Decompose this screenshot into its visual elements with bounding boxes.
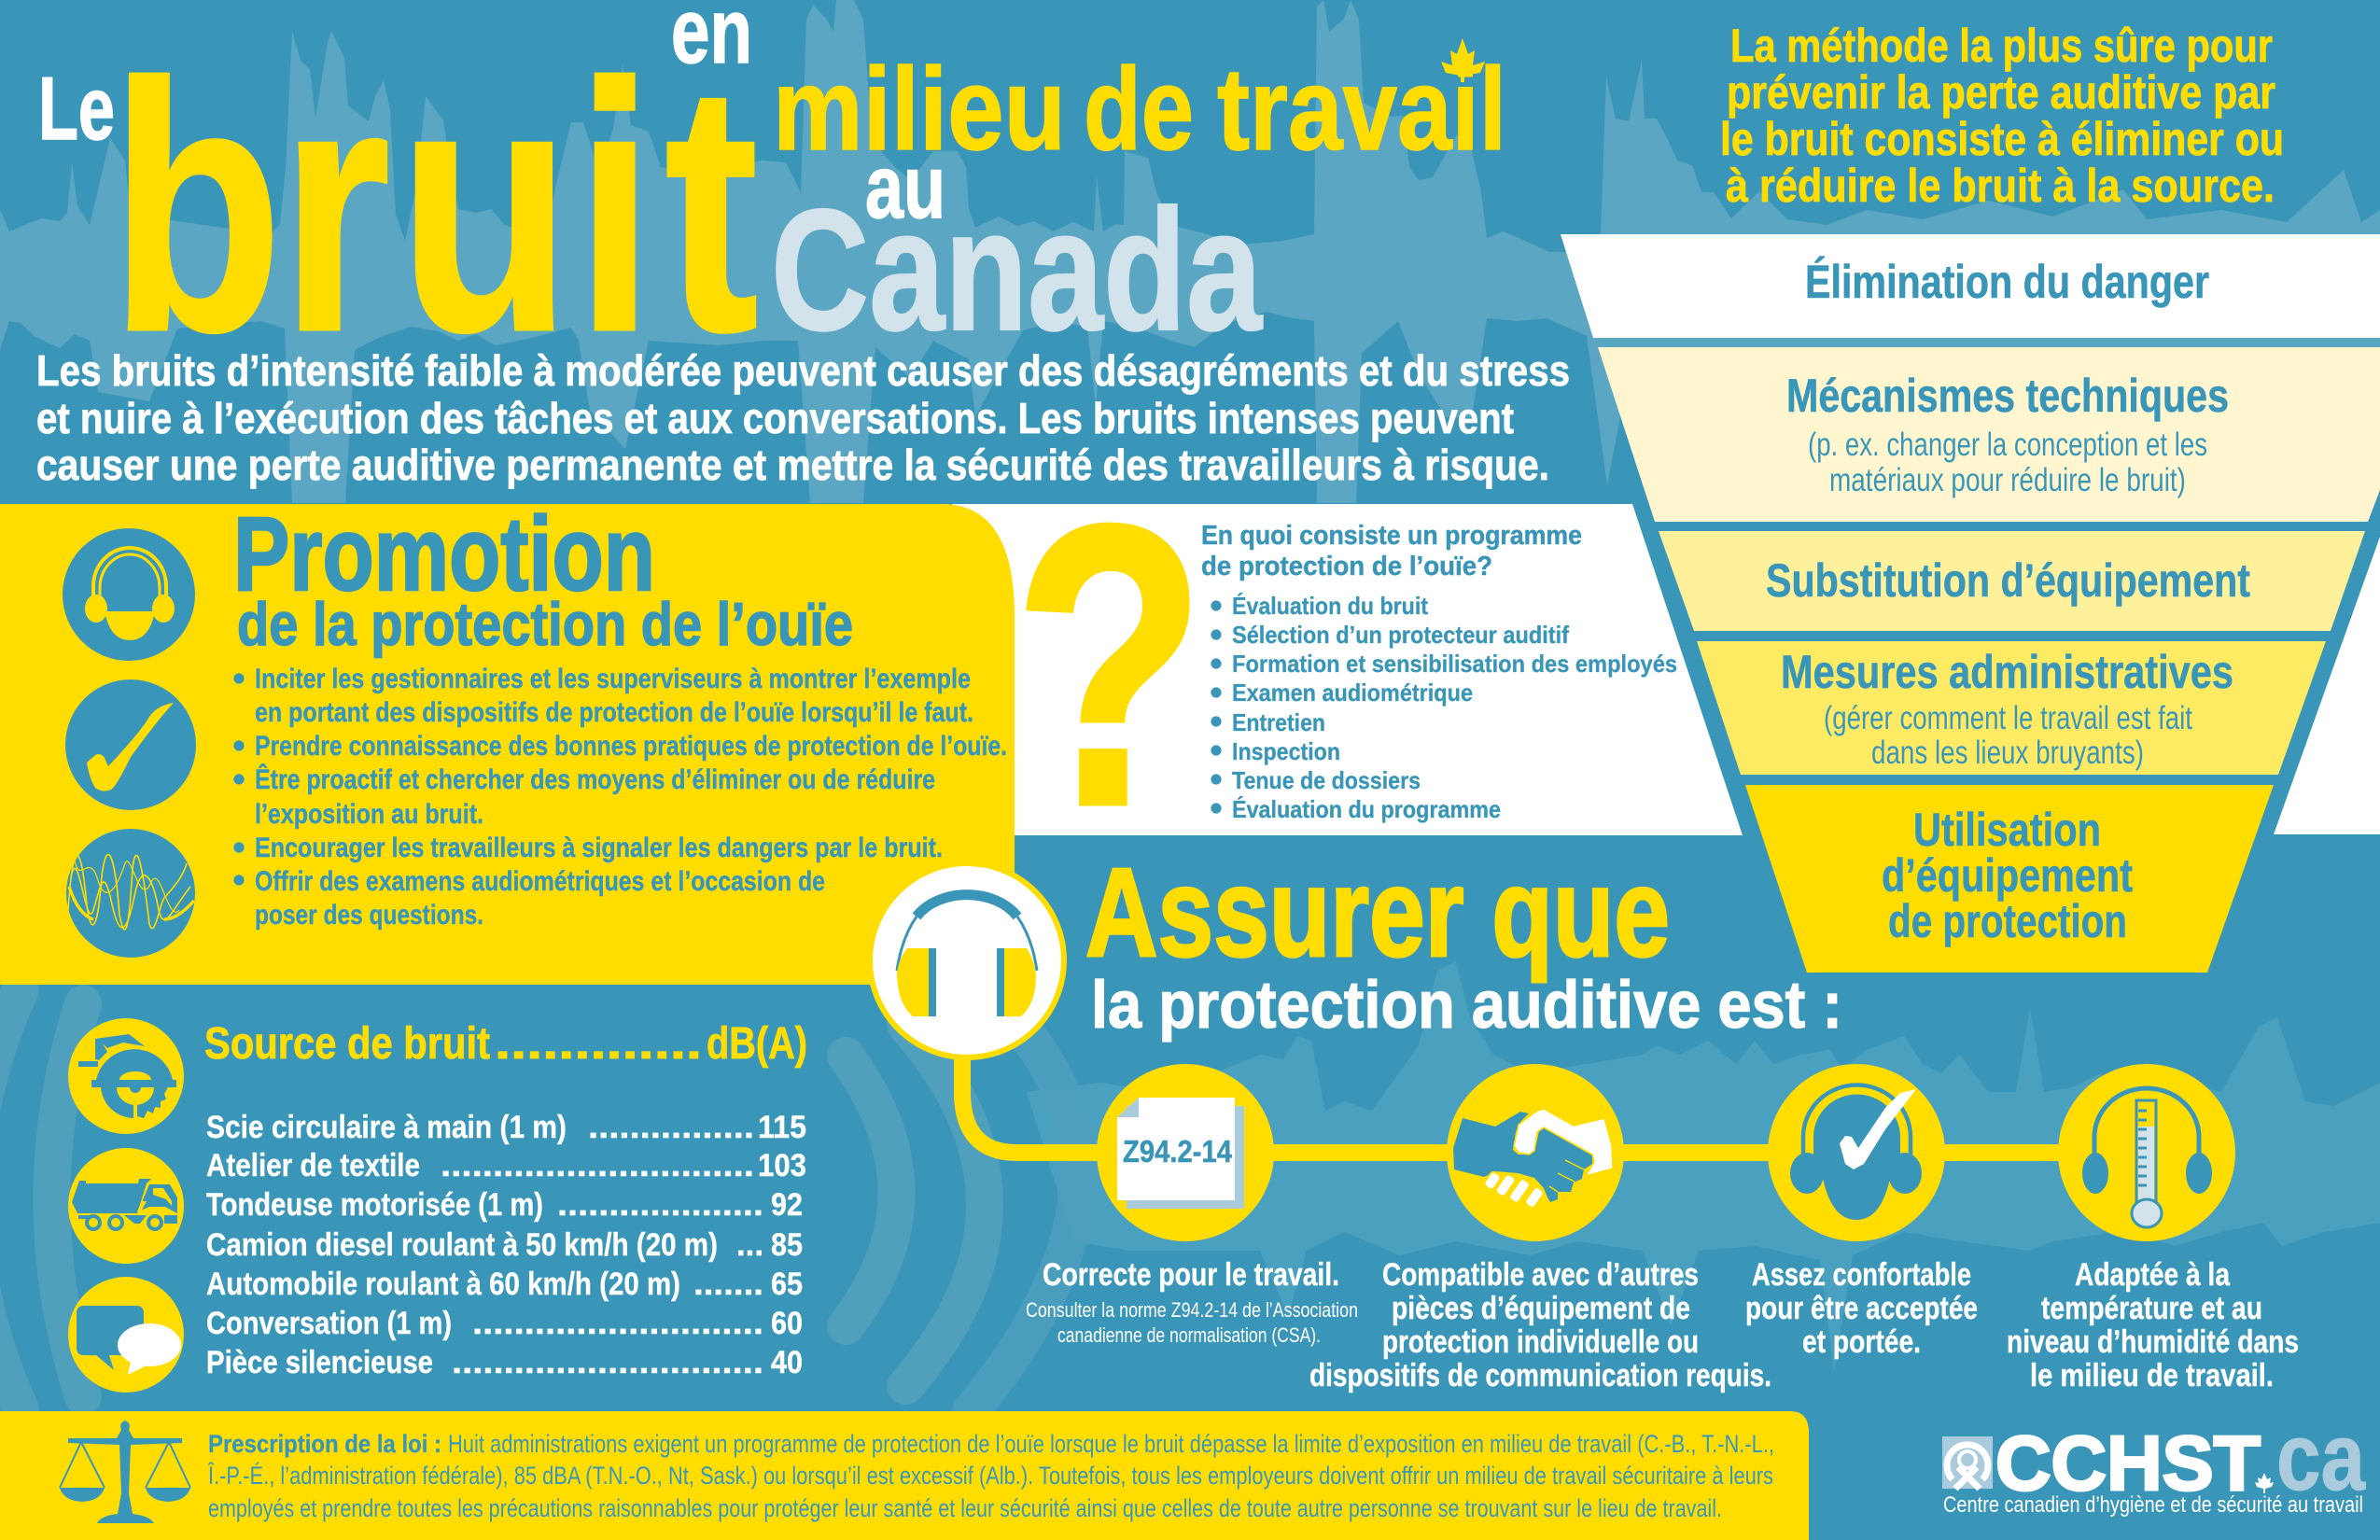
table rows: [206, 1110, 806, 1380]
table rows: ....................: [557, 1187, 763, 1223]
table rows: 115: [758, 1110, 806, 1145]
level: elimination: Élimination du danger: [1805, 256, 2209, 308]
bullet list: Inciter les gestionnaires et les superviseurs à montrer l’exemple: [255, 664, 971, 694]
logo: CCHST: CCHST: [1995, 1420, 2261, 1506]
question heading: de protection de l’ouïe?: [1201, 552, 1492, 581]
caption: comfortable: Assez confortable: [1752, 1257, 1971, 1293]
connector line: [962, 1050, 2063, 1153]
level: protective equipment: Utilisation: [1913, 804, 2101, 856]
heading: ensure that: Assurer que: [1085, 842, 1670, 983]
bullet list: [233, 664, 1007, 931]
title: [38, 0, 1506, 405]
program list: [1211, 592, 1677, 823]
program list: Évaluation du bruit: [1232, 592, 1428, 620]
caption: compatible: [1309, 1257, 1771, 1393]
level: protective equipment: [1745, 785, 2274, 973]
title: bruit: [110, 10, 759, 405]
caption: adapted: Adaptée à la: [2075, 1257, 2231, 1293]
bullet list: Prendre connaissance des bonnes pratiques de protection de l’ouïe.: [255, 731, 1007, 762]
table rows: Conversation (1 m): [206, 1306, 452, 1341]
level: engineering: (p. ex. changer la conception et les: [1808, 427, 2207, 463]
program list: Inspection: [1232, 737, 1340, 765]
level: engineering: Mécanismes techniques: [1786, 370, 2229, 422]
table rows: 85: [771, 1227, 803, 1263]
heading: ensure that: la protection auditive est :: [1091, 969, 1842, 1043]
bullet list: en portant des dispositifs de protection de l’ouïe lorsqu’il le faut.: [255, 697, 973, 728]
table rows: Automobile roulant à 60 km/h (20 m): [206, 1267, 680, 1302]
heading: promotion: Promotion: [233, 496, 655, 612]
level: administrative: Mesures administratives: [1781, 646, 2233, 698]
table rows: Atelier de textile: [206, 1148, 420, 1183]
caption: suitable for the job: [1026, 1257, 1358, 1347]
icon: headset with thermometer: [2058, 1064, 2235, 1241]
icon: large earmuffs: [870, 863, 1064, 1057]
callout: safest method: [1720, 20, 2284, 212]
legal text: employés et prendre toutes les précautions raisonnables pour protéger leur santé et leur sécurité ainsi que celles de toute autre personne se trouvant sur le lieu de travail.: [208, 1494, 1722, 1522]
bullet list: Offrir des examens audiométriques et l’occasion de: [255, 866, 825, 897]
table rows: .......: [693, 1267, 763, 1302]
intro text: et nuire à l’exécution des tâches et aux conversations. Les bruits intenses peuvent: [36, 394, 1514, 442]
level: administrative: (gérer comment le travail est fait: [1824, 700, 2192, 736]
table heading: [204, 1019, 807, 1069]
caption: adapted: température et au: [2041, 1291, 2262, 1326]
bullet list: Encourager les travailleurs à signaler les dangers par le bruit.: [255, 833, 943, 863]
table rows: Camion diesel roulant à 50 km/h (20 m): [206, 1227, 718, 1263]
panel: hierarchy of controls funnel: [1561, 234, 2380, 973]
title: milieu: [773, 45, 1066, 175]
callout: safest method: le bruit consiste à éliminer ou: [1720, 113, 2284, 165]
icon: handshake: [1447, 1064, 1624, 1241]
caption: compatible: dispositifs de communication requis.: [1309, 1358, 1771, 1393]
program list: Entretien: [1232, 708, 1325, 736]
icon: check mark: [65, 679, 196, 810]
question mark: ?: [1014, 442, 1206, 889]
program list: Évaluation du programme: [1232, 795, 1501, 823]
caption: adapted: le milieu de travail.: [2030, 1358, 2274, 1393]
icon: circular saw: [68, 1018, 184, 1134]
level: substitution: Substitution d’équipement: [1766, 554, 2250, 607]
heading: ensure that: [1085, 842, 1842, 1043]
panel: what is a hearing protection program: [952, 442, 2380, 889]
bullet list: l’exposition au bruit.: [255, 799, 483, 830]
table: noise sources: [204, 1019, 807, 1380]
table heading: .............: [495, 1019, 702, 1069]
program list: Formation et sensibilisation des employés: [1232, 650, 1677, 678]
caption: suitable for the job: canadienne de normalisation (CSA).: [1057, 1323, 1321, 1347]
callout: safest method: La méthode la plus sûre pour: [1730, 20, 2273, 72]
table rows: ...: [736, 1227, 763, 1263]
level: substitution: [1659, 531, 2365, 631]
level: protective equipment: de protection: [1888, 895, 2127, 947]
logo: CCHST: [1942, 1404, 2366, 1518]
caption: comfortable: et portée.: [1802, 1324, 1921, 1360]
icon: scales of justice: [60, 1421, 190, 1523]
table rows: 103: [758, 1148, 806, 1183]
bullet list: Être proactif et chercher des moyens d’éliminer ou de réduire: [255, 763, 935, 795]
icon: truck: [68, 1148, 184, 1264]
table rows: 40: [771, 1345, 803, 1380]
legal text: [207, 1430, 1774, 1522]
question heading: En quoi consiste un programme: [1201, 521, 1582, 551]
program list: Examen audiométrique: [1232, 679, 1473, 707]
panel: legal requirement: [0, 1411, 1809, 1540]
question heading: [1201, 521, 1582, 581]
level: engineering: [1598, 347, 2380, 522]
caption: suitable for the job: Consulter la norme Z94.2-14 de l’Association: [1026, 1298, 1358, 1322]
heading: promotion: [233, 496, 853, 658]
level: protective equipment: d’équipement: [1882, 849, 2133, 902]
title: de: [1084, 45, 1194, 175]
title: au: [865, 137, 945, 237]
caption: suitable for the job: Correcte pour le travail.: [1043, 1257, 1339, 1293]
legal text: Prescription de la loi :: [208, 1430, 441, 1458]
table rows: ..............................: [452, 1345, 763, 1380]
callout: safest method: prévenir la perte auditive par: [1727, 66, 2275, 119]
icon: maple leaf: [1441, 38, 1485, 82]
title: travail: [1217, 45, 1506, 175]
title: Le: [38, 59, 115, 159]
icon: standard document: [1097, 1064, 1274, 1241]
icon: speech bubbles: [68, 1277, 184, 1393]
table rows: ............................: [472, 1306, 763, 1341]
level: administrative: [1697, 641, 2326, 775]
intro text: causer une perte auditive permanente et mettre la sécurité des travailleurs à risque.: [36, 441, 1549, 489]
caption: adapted: niveau d’humidité dans: [2007, 1324, 2299, 1360]
table rows: 60: [771, 1306, 803, 1341]
caption: comfortable: pour être acceptée: [1745, 1291, 1978, 1326]
legal text: Huit administrations exigent un programme de protection de l’ouïe lorsque le bruit dépasse la limite d’exposition en milieu de travail (C.-B., T.-N.-L.,: [448, 1430, 1774, 1458]
caption: adapted: [2007, 1257, 2299, 1393]
table rows: Pièce silencieuse: [206, 1345, 433, 1380]
heading: promotion: de la protection de l’ouïe: [237, 590, 853, 658]
bullet list: poser des questions.: [255, 900, 483, 931]
caption: comfortable: [1745, 1257, 1978, 1360]
table rows: Scie circulaire à main (1 m): [206, 1110, 567, 1145]
program list: Tenue de dossiers: [1232, 766, 1421, 794]
caption: compatible: protection individuelle ou: [1382, 1324, 1699, 1360]
program list: Sélection d’un protecteur auditif: [1232, 621, 1569, 649]
legal text: Î.-P.-É., l’administration fédérale), 85 dBA (T.N.-O., Nt, Sask.) ou lorsqu’il est excessif (Alb.). Toutefois, tous les employeurs doivent offrir un milieu de travail sécuritaire à leurs: [207, 1461, 1773, 1490]
table rows: 65: [771, 1267, 803, 1302]
table rows: ................: [588, 1110, 754, 1145]
caption: compatible: Compatible avec d’autres: [1382, 1257, 1699, 1293]
logo: CCHST: ca: [2276, 1404, 2366, 1510]
level: administrative: dans les lieux bruyants): [1871, 735, 2144, 771]
icon: comfort headset with check: [1768, 1064, 1945, 1241]
icon: sound waves: [66, 829, 195, 958]
panel: promotion of hearing protection: [0, 496, 1015, 985]
table rows: Tondeuse motorisée (1 m): [206, 1187, 543, 1223]
table heading: Source de bruit: [204, 1019, 490, 1069]
title: Canada: [771, 175, 1264, 367]
icon: head with earmuffs: [63, 528, 195, 661]
intro text: [36, 346, 1570, 489]
caption: compatible: pièces d’équipement de: [1392, 1291, 1690, 1326]
table rows: 92: [771, 1187, 803, 1223]
level: elimination: [1561, 234, 2380, 338]
callout: safest method: à réduire le bruit à la source.: [1726, 160, 2275, 212]
table heading: dB(A): [707, 1019, 807, 1069]
table rows: ..............................: [441, 1148, 754, 1183]
icon: standard document: Z94.2-14: [1123, 1134, 1233, 1169]
intro text: Les bruits d’intensité faible à modérée peuvent causer des désagréments et du stress: [36, 346, 1570, 395]
level: engineering: matériaux pour réduire le bruit): [1829, 462, 2186, 498]
